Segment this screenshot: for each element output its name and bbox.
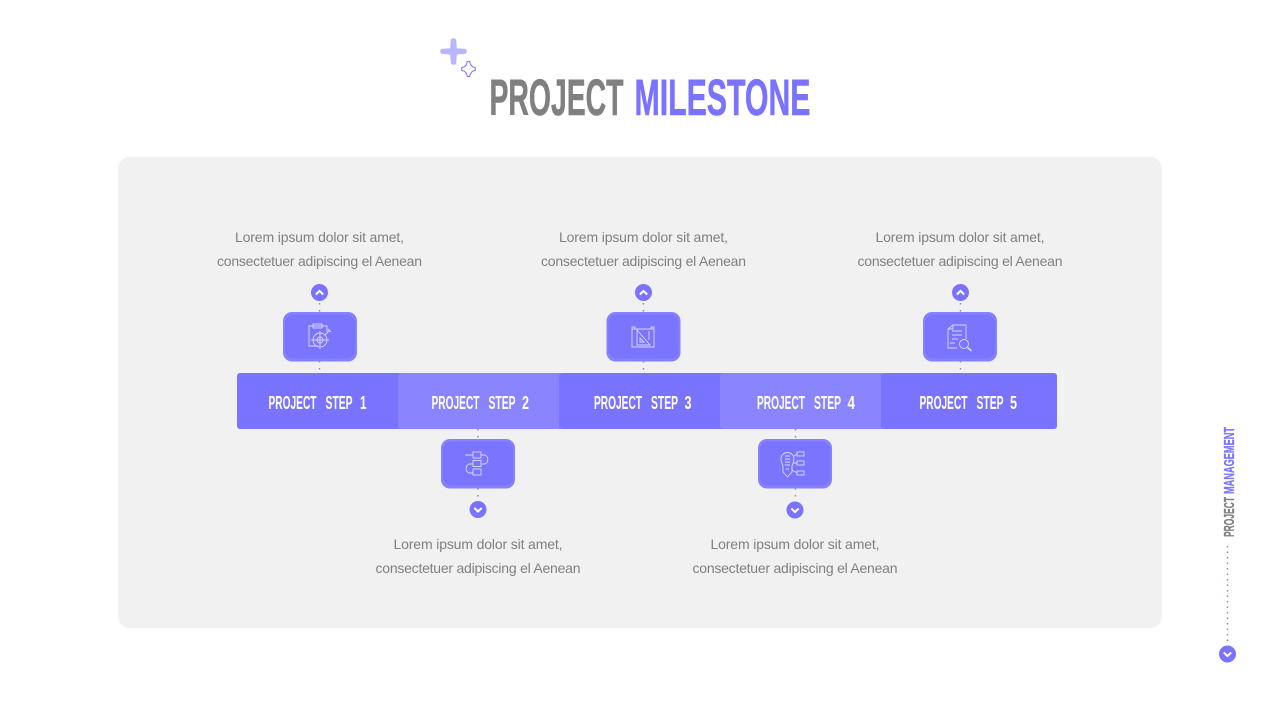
step 4 label: 4 xyxy=(848,392,856,413)
step 4 down arrow xyxy=(786,502,804,518)
side label: MANAGEMENT xyxy=(1221,427,1238,494)
step 2 description xyxy=(376,536,580,576)
side label xyxy=(1221,427,1238,537)
side dotted line xyxy=(1226,546,1228,643)
step 4 description xyxy=(692,536,898,576)
step 5 up arrow xyxy=(952,284,969,301)
timeline bar xyxy=(237,373,1057,429)
step 2 description: consectetuer adipiscing el Aenean xyxy=(376,560,580,576)
step 1 label: STEP xyxy=(326,392,352,413)
side label: PROJECT xyxy=(1221,497,1238,537)
step 5 description: Lorem ipsum dolor sit amet, xyxy=(876,229,1044,245)
step 1 label: PROJECT xyxy=(268,392,317,413)
step 2 down arrow xyxy=(470,501,486,518)
step 5 label: STEP xyxy=(976,392,1004,413)
icon: small outlined sparkle xyxy=(462,61,475,76)
step 3 label: STEP xyxy=(651,392,678,413)
step 1 segment xyxy=(237,373,411,429)
step 5 label: PROJECT xyxy=(920,392,968,413)
step 4 label: PROJECT xyxy=(757,392,805,413)
step 3 up arrow xyxy=(635,284,652,301)
step 3 description xyxy=(541,229,746,269)
step 5 segment xyxy=(881,373,1057,429)
step 5 label: 5 xyxy=(1010,392,1017,413)
step 4 label: STEP xyxy=(814,392,841,413)
step 1 description: consectetuer adipiscing el Aenean xyxy=(217,253,422,269)
step 3 label: 3 xyxy=(684,392,692,413)
step 3 description: consectetuer adipiscing el Aenean xyxy=(541,253,746,269)
step 2 label: 2 xyxy=(522,392,529,413)
step 2 icon tile: workflow checklist xyxy=(441,439,515,488)
step 4 icon tile: mind pencil map xyxy=(758,439,832,488)
step 5 description xyxy=(858,229,1062,269)
step 1 label: 1 xyxy=(360,392,366,413)
step 5 description: consectetuer adipiscing el Aenean xyxy=(858,253,1062,269)
step 2 label: STEP xyxy=(488,392,516,413)
step 3 label: PROJECT xyxy=(594,392,642,413)
panel: timeline background xyxy=(118,157,1162,628)
step 1 icon tile: clipboard target xyxy=(283,312,357,362)
title: PROJECT xyxy=(490,69,624,126)
step 2 label: PROJECT xyxy=(432,392,480,413)
side down arrow xyxy=(1219,646,1236,662)
title: MILESTONE xyxy=(634,69,810,126)
step 4 segment xyxy=(720,373,885,429)
step 3 segment xyxy=(559,373,735,429)
step 1 description xyxy=(217,229,422,269)
step 5 icon tile: document search xyxy=(923,312,997,362)
step 1 description: Lorem ipsum dolor sit amet, xyxy=(235,229,404,245)
step 4 description: Lorem ipsum dolor sit amet, xyxy=(710,536,880,552)
connector dots xyxy=(320,303,960,500)
step 1 up arrow xyxy=(311,284,328,301)
step 2 segment xyxy=(398,373,563,429)
icon: large sparkle xyxy=(440,38,467,65)
step 3 description: Lorem ipsum dolor sit amet, xyxy=(559,229,728,245)
step 2 description: Lorem ipsum dolor sit amet, xyxy=(394,536,562,552)
step 3 icon tile: blueprint xyxy=(606,312,680,362)
step 4 description: consectetuer adipiscing el Aenean xyxy=(692,560,898,576)
